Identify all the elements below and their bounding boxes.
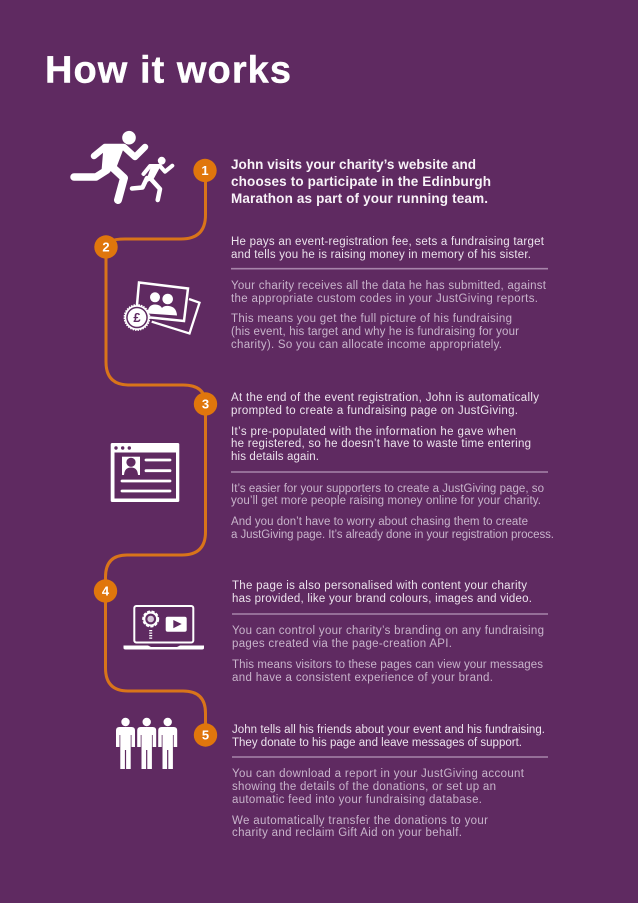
step 4 benefits: pages created via the page-creation API. [232, 638, 452, 650]
step 2 benefits: Your charity receives all the data he has submitted, against [231, 280, 547, 292]
step 5 text: They donate to his page and leave messages of support. [232, 737, 522, 749]
icon: photos with pound badge: £ [133, 310, 141, 325]
step 2 text: He pays an event-registration fee, sets a fundraising target [231, 236, 545, 248]
step 4 benefits [232, 625, 544, 684]
step marker 4 [94, 579, 117, 603]
step 1 heading [231, 157, 491, 206]
step 4 benefits: This means visitors to these pages can view your messages [232, 659, 543, 671]
step 5 text: John tells all his friends about your event and his fundraising. [232, 724, 545, 736]
icon: photos with pound badge [124, 282, 200, 334]
step 1 heading: chooses to participate in the Edinburgh [231, 174, 491, 189]
step marker 3 [194, 392, 217, 416]
step 3 text: It’s pre-populated with the information he gave when [231, 426, 516, 438]
step 2 benefits: charity). So you can allocate income appropriately. [231, 339, 502, 351]
step 5 benefits: charity and reclaim Gift Aid on your behalf. [232, 827, 462, 839]
step 4 benefits: You can control your charity’s branding on any fundraising [232, 625, 544, 637]
step 4 benefits: and have a consistent experience of your brand. [232, 672, 493, 684]
step 2 benefits [231, 280, 547, 351]
step 3 benefits: you’ll get more people raising money online for your charity. [231, 495, 541, 507]
step marker 1 [193, 159, 217, 182]
step marker 1: 1 [201, 163, 209, 178]
step marker 5 [194, 723, 217, 747]
step marker 4: 4 [102, 584, 110, 598]
step 3 text: At the end of the event registration, John is automatically [231, 392, 539, 404]
step 5 benefits [232, 768, 525, 839]
step 3 text [231, 392, 539, 463]
step 3 benefits: And you don’t have to worry about chasing them to create [231, 516, 528, 528]
step marker 3: 3 [202, 396, 209, 412]
step 1 heading: John visits your charity’s website and [231, 157, 476, 172]
icon: three people [116, 718, 177, 769]
step 3 text: he registered, so he doesn’t have to waste time entering [231, 438, 531, 450]
step 4 text: The page is also personalised with content your charity [232, 580, 527, 592]
step 5 text [232, 724, 545, 749]
icon: laptop with settings and video [124, 606, 204, 650]
step 3 text: his details again. [231, 451, 319, 463]
step 5 benefits: You can download a report in your JustGiving account [232, 768, 525, 780]
step 3 benefits: a JustGiving page. It’s already done in your registration process. [231, 529, 554, 541]
step 5 benefits: We automatically transfer the donations to your [232, 815, 488, 827]
step 5 benefits: showing the details of the donations, or set up an [232, 781, 496, 793]
step 2 text [231, 236, 545, 261]
step 2 benefits: This means you get the full picture of his fundraising [231, 313, 512, 325]
step 2 benefits: (his event, his target and why he is fundraising for your [231, 326, 519, 338]
title: How it works [45, 50, 291, 92]
step marker 5: 5 [202, 728, 209, 742]
step 5 benefits: automatic feed into your fundraising database. [232, 794, 482, 806]
step 4 text: has provided, like your brand colours, images and video. [232, 593, 532, 605]
step 3 benefits [231, 483, 554, 541]
step 3 text: prompted to create a fundraising page on JustGiving. [231, 405, 518, 417]
step 3 benefits: It’s easier for your supporters to create a JustGiving page, so [231, 483, 544, 495]
step 2 text: and tells you he is raising money in memory of his sister. [231, 249, 531, 261]
icon: browser profile page [111, 443, 179, 502]
step marker 2: 2 [102, 240, 110, 254]
icon: runners [74, 131, 172, 200]
step 2 benefits: the appropriate custom codes in your JustGiving reports. [231, 293, 538, 305]
timeline path [106, 170, 206, 735]
step 4 text [232, 580, 532, 605]
step marker 2 [94, 235, 118, 259]
step 1 heading: Marathon as part of your running team. [231, 191, 488, 206]
